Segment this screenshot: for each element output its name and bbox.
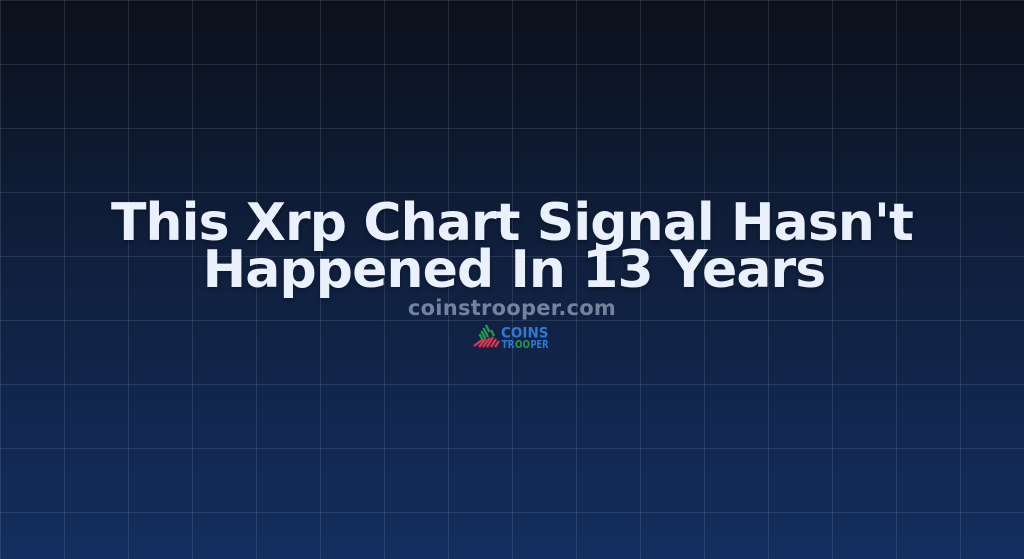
logo word: COINS: COINS — [501, 326, 548, 342]
logo word: TROOPER: TR — [502, 339, 514, 351]
title: This Xrp Chart Signal Hasn't — [111, 193, 913, 253]
logo word: TROOPER: PER — [530, 339, 548, 351]
logo word: TROOPER: OO — [515, 339, 530, 351]
title — [111, 193, 913, 300]
logo: Coins Trooper — [473, 324, 548, 351]
icon: green and red striped peaks — [474, 325, 499, 347]
title: Happened In 13 Years — [203, 240, 825, 300]
logo word: TROOPER — [502, 339, 548, 351]
domain text: coinstrooper.com — [408, 296, 616, 320]
